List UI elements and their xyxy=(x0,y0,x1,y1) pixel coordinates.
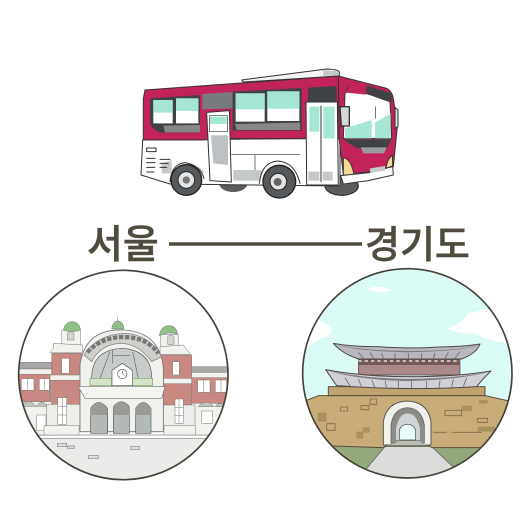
gate arch xyxy=(383,401,431,445)
towers xyxy=(44,317,195,435)
side wings xyxy=(17,362,230,435)
rear wheel xyxy=(170,163,204,195)
platform xyxy=(328,387,485,396)
road xyxy=(366,446,453,478)
front wheel xyxy=(259,161,300,198)
middle windows xyxy=(233,88,302,131)
rear door xyxy=(207,111,231,182)
side panels xyxy=(232,155,300,180)
clouds xyxy=(302,287,515,350)
ground xyxy=(42,438,206,479)
entrance xyxy=(78,387,165,398)
grass xyxy=(334,446,480,468)
windshield xyxy=(343,83,392,138)
circle outline xyxy=(303,269,512,478)
central arch xyxy=(80,330,163,432)
connector line xyxy=(169,242,362,246)
upper roof xyxy=(333,343,480,359)
bumper xyxy=(341,167,393,184)
red front xyxy=(338,76,397,175)
icon: bus xyxy=(141,69,398,198)
far side wheel xyxy=(219,176,358,195)
rear grill xyxy=(147,148,170,172)
rear window frame xyxy=(150,95,200,133)
grey panel above door xyxy=(202,92,233,109)
heading: 경기도: 경기도 xyxy=(365,225,470,267)
lower white body xyxy=(141,138,340,186)
roof unit xyxy=(242,69,339,82)
red upper side xyxy=(143,76,340,140)
upper hall xyxy=(358,358,460,375)
illustration: Gyeonggi fortress gate circle xyxy=(302,269,515,478)
lower roof xyxy=(326,370,491,389)
circle outline xyxy=(19,270,228,480)
mirrors xyxy=(340,107,349,126)
wall xyxy=(302,396,515,448)
dash and bonnet xyxy=(343,139,392,148)
headlights xyxy=(343,157,354,175)
heading: 서울: 서울 xyxy=(87,224,159,267)
front door xyxy=(306,102,338,185)
illustration: Seoul station circle xyxy=(18,270,229,480)
front top window xyxy=(308,86,337,102)
